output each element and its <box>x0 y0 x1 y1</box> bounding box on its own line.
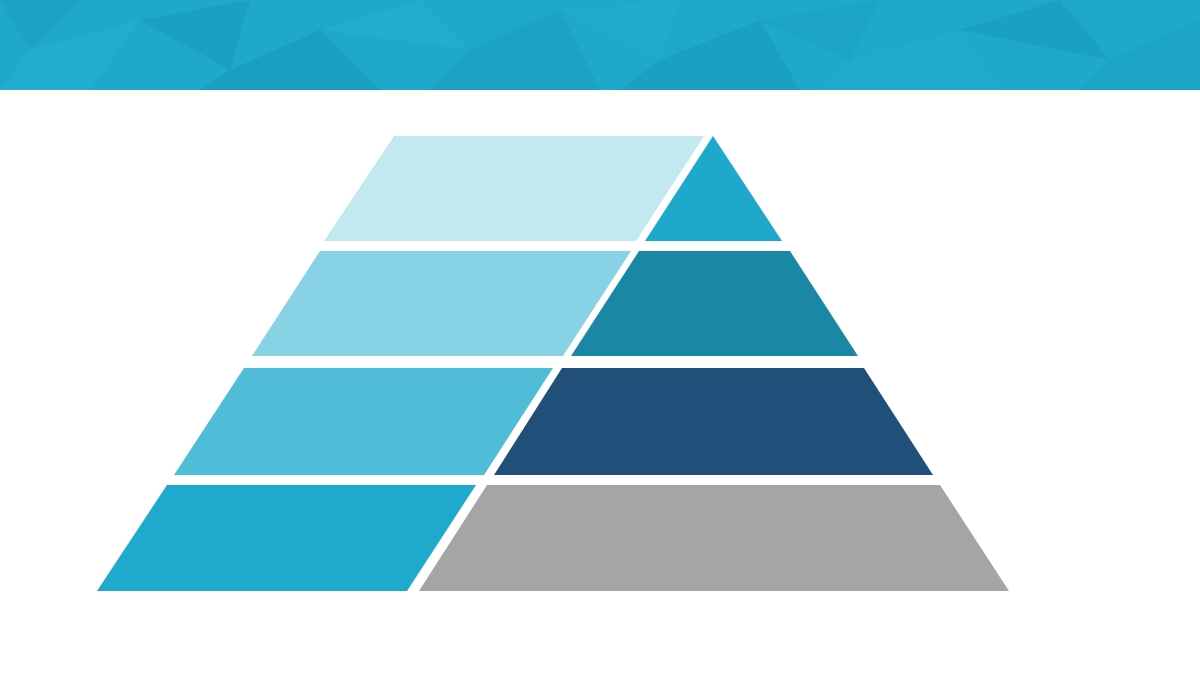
tier 4 left <box>97 485 476 591</box>
tier 1 right triangle <box>645 136 782 241</box>
tier 3 left <box>174 368 553 475</box>
pyramid <box>97 136 1009 591</box>
tier 4 right <box>419 485 1009 591</box>
tier 2 left <box>252 251 631 356</box>
header band <box>0 0 1200 90</box>
tier 1 left <box>324 136 704 241</box>
tier 3 right <box>494 368 933 475</box>
tier 2 right <box>571 251 858 356</box>
